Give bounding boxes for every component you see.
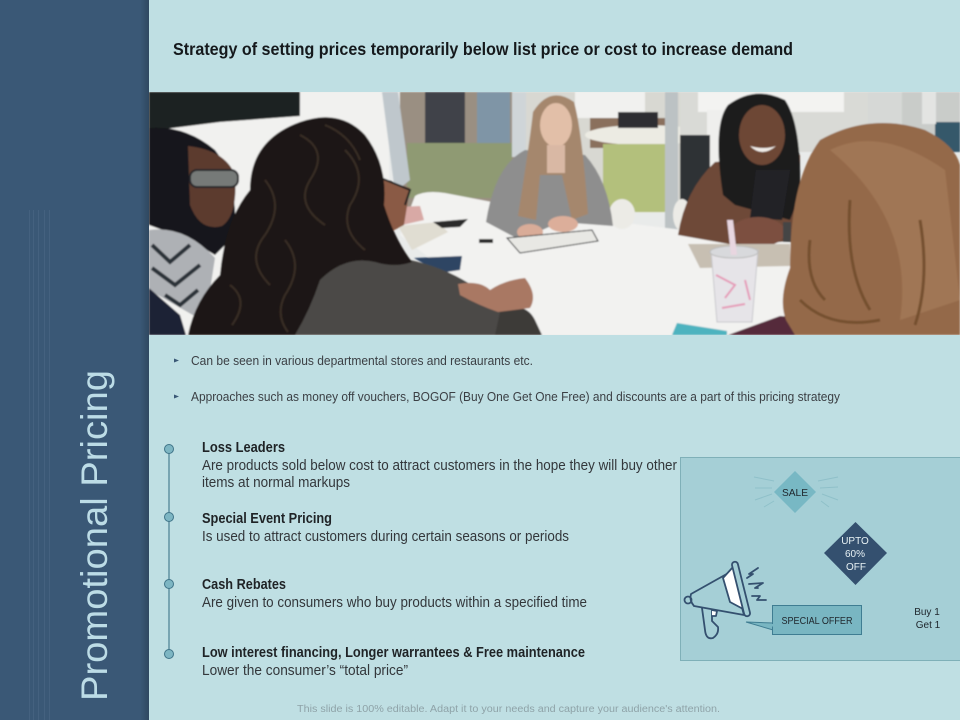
label: buy 1 get 1: Buy 1 [914, 607, 940, 618]
callout: special offer: SPECIAL OFFER [782, 616, 852, 627]
item: loss leaders: Loss Leaders [202, 440, 285, 456]
item: loss leaders [164, 440, 677, 491]
footer note: This slide is 100% editable. Adapt it to your needs and capture your audience's attention. [297, 704, 720, 715]
item: cash rebates: Cash Rebates [202, 577, 286, 593]
photo: brown-haired woman [783, 123, 960, 335]
item: low interest financing: Low interest financing, Longer warrantees & Free maintenance [202, 645, 585, 661]
photo: centre woman [486, 95, 613, 253]
discount badge: OFF [846, 562, 866, 573]
item: loss leaders: items at normal markups [202, 475, 350, 491]
item: low interest financing: Lower the consumer’s “total price” [202, 663, 408, 679]
bullet two: Approaches such as money off vouchers, BOGOF (Buy One Get One Free) and discounts are a part of this pricing strategy [191, 390, 841, 404]
label: buy 1 get 1 [914, 607, 941, 631]
bullet one: Can be seen in various departmental stores and restaurants etc. [191, 354, 533, 368]
discount badge: UPTO [841, 536, 869, 547]
item: low interest financing [164, 645, 585, 679]
item: special event pricing: Is used to attract customers during certain seasons or periods [202, 529, 569, 545]
item: cash rebates [164, 577, 587, 611]
photo: teal folder and maroon top [672, 315, 796, 335]
sale badge: SALE [782, 488, 808, 499]
sale badge [774, 471, 816, 513]
photo: right woman [678, 94, 800, 268]
photo: meeting around a table [149, 92, 960, 335]
photo: white table [400, 192, 800, 335]
photo: woman with curly hair [188, 117, 542, 335]
item: loss leaders: Are products sold below cost to attract customers in the hope they will buy other [202, 458, 677, 474]
left sidebar [0, 0, 149, 720]
icon: sale rays [754, 477, 838, 507]
item: special event pricing [164, 511, 569, 545]
bullet points [174, 354, 841, 404]
item: cash rebates: Are given to consumers who buy products within a specified time [202, 595, 587, 611]
photo: chairs [609, 199, 691, 231]
photo: left woman [149, 128, 238, 335]
promotion panel [680, 458, 960, 660]
title: Strategy of setting prices temporarily below list price or cost to increase demand [173, 39, 793, 59]
sidebar title: Promotional Pricing [74, 370, 115, 701]
discount badge: 60% [845, 549, 865, 560]
icon: megaphone [684, 561, 766, 638]
timeline list [164, 440, 677, 679]
item: special event pricing: Special Event Pricing [202, 511, 332, 527]
photo: table items [398, 206, 493, 273]
label: buy 1 get 1: Get 1 [916, 620, 941, 631]
photo: wall screen [149, 92, 300, 131]
photo: back wall and windows [149, 92, 960, 335]
callout: special offer [746, 606, 862, 634]
discount badge [824, 522, 887, 585]
photo: plastic cup [710, 220, 758, 322]
